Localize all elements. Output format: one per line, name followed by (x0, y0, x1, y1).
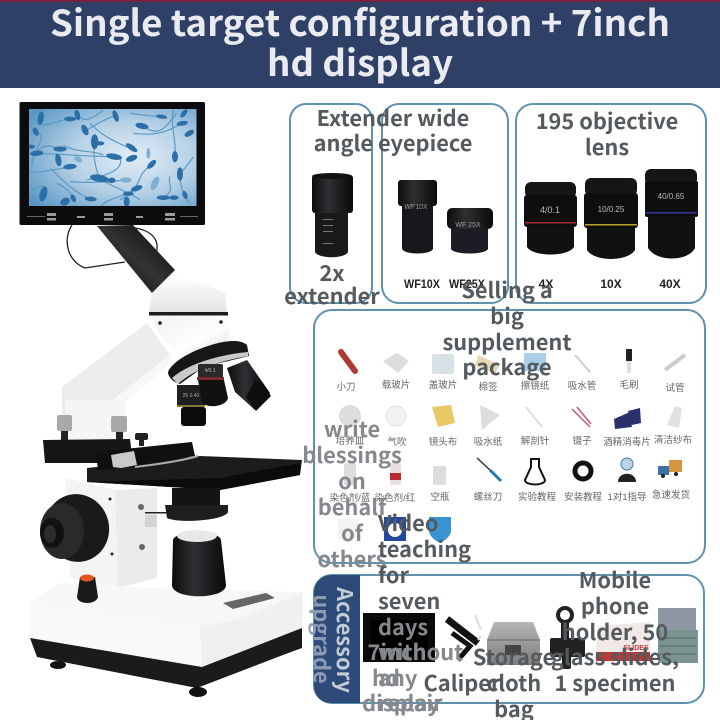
column (65, 400, 157, 588)
microscope with 7 inch display (20, 102, 303, 697)
microscopic sample image (25, 108, 195, 207)
objective labels: 4X (539, 277, 553, 291)
labels row 2: 镜头布 (429, 436, 457, 448)
text: write blessings on behalf of others: write (324, 413, 380, 444)
text: write blessings on behalf of others: others (318, 543, 387, 574)
text: video teaching for seven days without any repair: Video (377, 507, 438, 538)
icon: extender tube (312, 173, 353, 257)
objective C: 25 0.40 (183, 393, 200, 399)
text: mobile phone holder, 50 glass slides, 1 specimen (551, 564, 679, 698)
labels row 3: 实验教程 (518, 491, 556, 503)
labels row 1: 载玻片 (382, 379, 410, 391)
text: 7inch hd display (362, 636, 440, 718)
icon: storage bag (487, 622, 540, 665)
heading: 195 objective lens: 195 objective (536, 105, 678, 136)
heading: 195 objective lens (536, 105, 678, 162)
microscope tube (97, 225, 175, 293)
heading: 2x extender: 2x (319, 257, 345, 288)
text: 7inch hd display: 7inch (368, 636, 426, 667)
text: accessory upgrade: Accessory (330, 586, 361, 693)
icon: WF25X eyepiece (447, 208, 493, 254)
head (149, 277, 230, 357)
arm (62, 323, 172, 430)
nosepiece ring (168, 341, 249, 384)
labels row 2: 酒精消毒片 (603, 436, 651, 448)
icon: 40X objective (645, 169, 698, 258)
text: video teaching for seven days without any repair: days (378, 611, 428, 642)
base (30, 583, 303, 697)
labels row 2: 气吹 (387, 436, 407, 448)
text: mobile phone holder, 50 glass slides, 1 specimen: holder, 50 (562, 616, 668, 647)
panel: accessory upgrade (307, 575, 704, 703)
labels row 2: 镊子 (572, 435, 592, 447)
labels row 3: 1对1指导 (607, 491, 647, 503)
objective labels (539, 277, 681, 291)
heading: extender wide angle eyepiece (314, 102, 472, 158)
heading: 195 objective lens: lens (585, 131, 629, 162)
icon: 40X objective: 40/0.65 (658, 192, 685, 201)
icon: display cable (67, 225, 157, 268)
labels row 1: 吸水管 (568, 380, 596, 392)
text: video teaching for seven days without any repair: any (378, 662, 418, 693)
labels row 1 (336, 379, 685, 394)
text: mobile phone holder, 50 glass slides, 1 specimen: Mobile (579, 564, 651, 595)
text: write blessings on behalf of others: blessings (302, 439, 402, 470)
panel: supplement package (314, 310, 705, 563)
labels row 1: 试管 (665, 382, 685, 394)
text: storage cloth bag: Storage (473, 641, 555, 672)
light knob (172, 530, 226, 596)
eyepiece labels: WF25X (449, 277, 485, 291)
icon row 3 (344, 458, 682, 485)
text: write blessings on behalf of others: of (341, 517, 364, 548)
panel: wide angle eyepieces (382, 104, 508, 303)
text: video teaching for seven days without any repair: without (378, 636, 463, 667)
text: mobile phone holder, 50 glass slides, 1 specimen: phone (581, 590, 649, 621)
text: accessory upgrade: upgrade (307, 594, 338, 684)
labels row 2: 吸水纸 (474, 436, 503, 448)
heading: selling a big supplement package: big (490, 300, 524, 331)
text: video teaching for seven days without any repair: repair (378, 687, 443, 718)
labels row 2: 解剖针 (521, 435, 550, 447)
labels row 3: 急速发货 (652, 489, 690, 501)
text: video teaching for seven days without any repair: teaching (378, 533, 471, 564)
objective A: 4/0.1 (204, 368, 216, 374)
coarse focus knob (37, 487, 117, 569)
text: mobile phone holder, 50 glass slides, 1 specimen: glass slides, (551, 641, 679, 672)
icon: WF10X eyepiece (398, 180, 437, 254)
text: write blessings on behalf of others: behalf (318, 491, 387, 522)
text: video teaching for seven days without any repair: seven (378, 585, 440, 616)
orange brightness knob (77, 574, 98, 603)
text: caliper: Caliper (424, 667, 501, 698)
objective B (227, 360, 271, 411)
labels row 2: 培养皿 (336, 435, 365, 447)
labels row 1: 毛刷 (619, 379, 639, 391)
icon: 4X objective: 4/0.1 (540, 205, 560, 215)
labels row 3: 染色剂/红 (375, 492, 416, 504)
text: write blessings on behalf of others: on (338, 465, 366, 496)
heading: selling a big supplement package (442, 274, 572, 382)
icon: 10X objective: 10/0.25 (598, 205, 625, 214)
eyepiece labels (404, 277, 485, 291)
text: storage cloth bag (473, 641, 555, 720)
condenser (145, 488, 228, 521)
icon row 4 (338, 517, 451, 543)
labels row 3: 空瓶 (430, 491, 450, 503)
labels row 3: 螺丝刀 (474, 491, 502, 503)
title (50, 0, 670, 87)
text: mobile phone holder, 50 glass slides, 1 specimen: 1 specimen (554, 667, 676, 698)
icon row 2 (339, 405, 682, 430)
text: 7inch hd display: hd (372, 662, 400, 693)
accessory side tab (314, 575, 360, 703)
icon: caliper (447, 615, 481, 660)
heading: 2x extender (284, 257, 380, 311)
header banner (0, 0, 720, 88)
text: storage cloth bag: cloth (487, 667, 541, 698)
eyepiece labels: WF10X (404, 277, 440, 291)
icon row 1 (341, 349, 685, 374)
heading: extender wide angle eyepiece: Extender wide (317, 102, 469, 133)
labels row 2: 清洁纱布 (654, 434, 692, 446)
icon: glass slides box (595, 622, 650, 662)
icon: phone holder (550, 608, 585, 669)
text: accessory upgrade (307, 586, 361, 693)
labels row 1: 擦镜纸 (521, 380, 550, 392)
text: 7inch hd display: display (362, 687, 440, 718)
nosepiece and objectives (168, 341, 271, 426)
labels row 2 (336, 434, 692, 448)
monitor buttons (27, 213, 198, 220)
heading: extender wide angle eyepiece: angle eyepiece (314, 127, 472, 158)
heading: selling a big supplement package: supplement (442, 326, 572, 357)
monitor (20, 102, 205, 225)
icon: 10X objective (584, 178, 638, 259)
panel: 2x extender (290, 104, 372, 303)
heading: 2x extender: extender (284, 280, 380, 311)
labels row 1: 棉签 (478, 381, 498, 393)
labels row 1: 盖玻片 (429, 379, 457, 391)
text: video teaching for seven days without any repair (377, 507, 471, 718)
objective labels: 10X (600, 277, 622, 291)
panel: objective lenses (516, 104, 706, 303)
icon: 7 inch display (363, 613, 435, 662)
labels row 3: 染色剂/蓝 (330, 492, 371, 504)
stage clamp knobs (57, 415, 148, 446)
text: write blessings on behalf of others (302, 413, 402, 574)
title: hd display (267, 35, 453, 87)
icon: glass slides box: SLIDES (623, 645, 649, 652)
icon: WF10X eyepiece: WF10X (404, 204, 428, 211)
heading: selling a big supplement package: Selling a (461, 274, 553, 305)
heading: selling a big supplement package: package (462, 351, 552, 382)
icon: WF25X eyepiece: WF 25X (455, 222, 481, 229)
labels row 1: 小刀 (336, 382, 356, 393)
text: video teaching for seven days without any repair: for (378, 559, 409, 590)
labels row 3 (330, 489, 690, 504)
stage (43, 439, 302, 490)
icon: specimen box (658, 608, 698, 663)
labels row 3: 安装教程 (564, 491, 602, 503)
icon: 4X objective (524, 182, 577, 254)
objective labels: 40X (659, 277, 681, 291)
